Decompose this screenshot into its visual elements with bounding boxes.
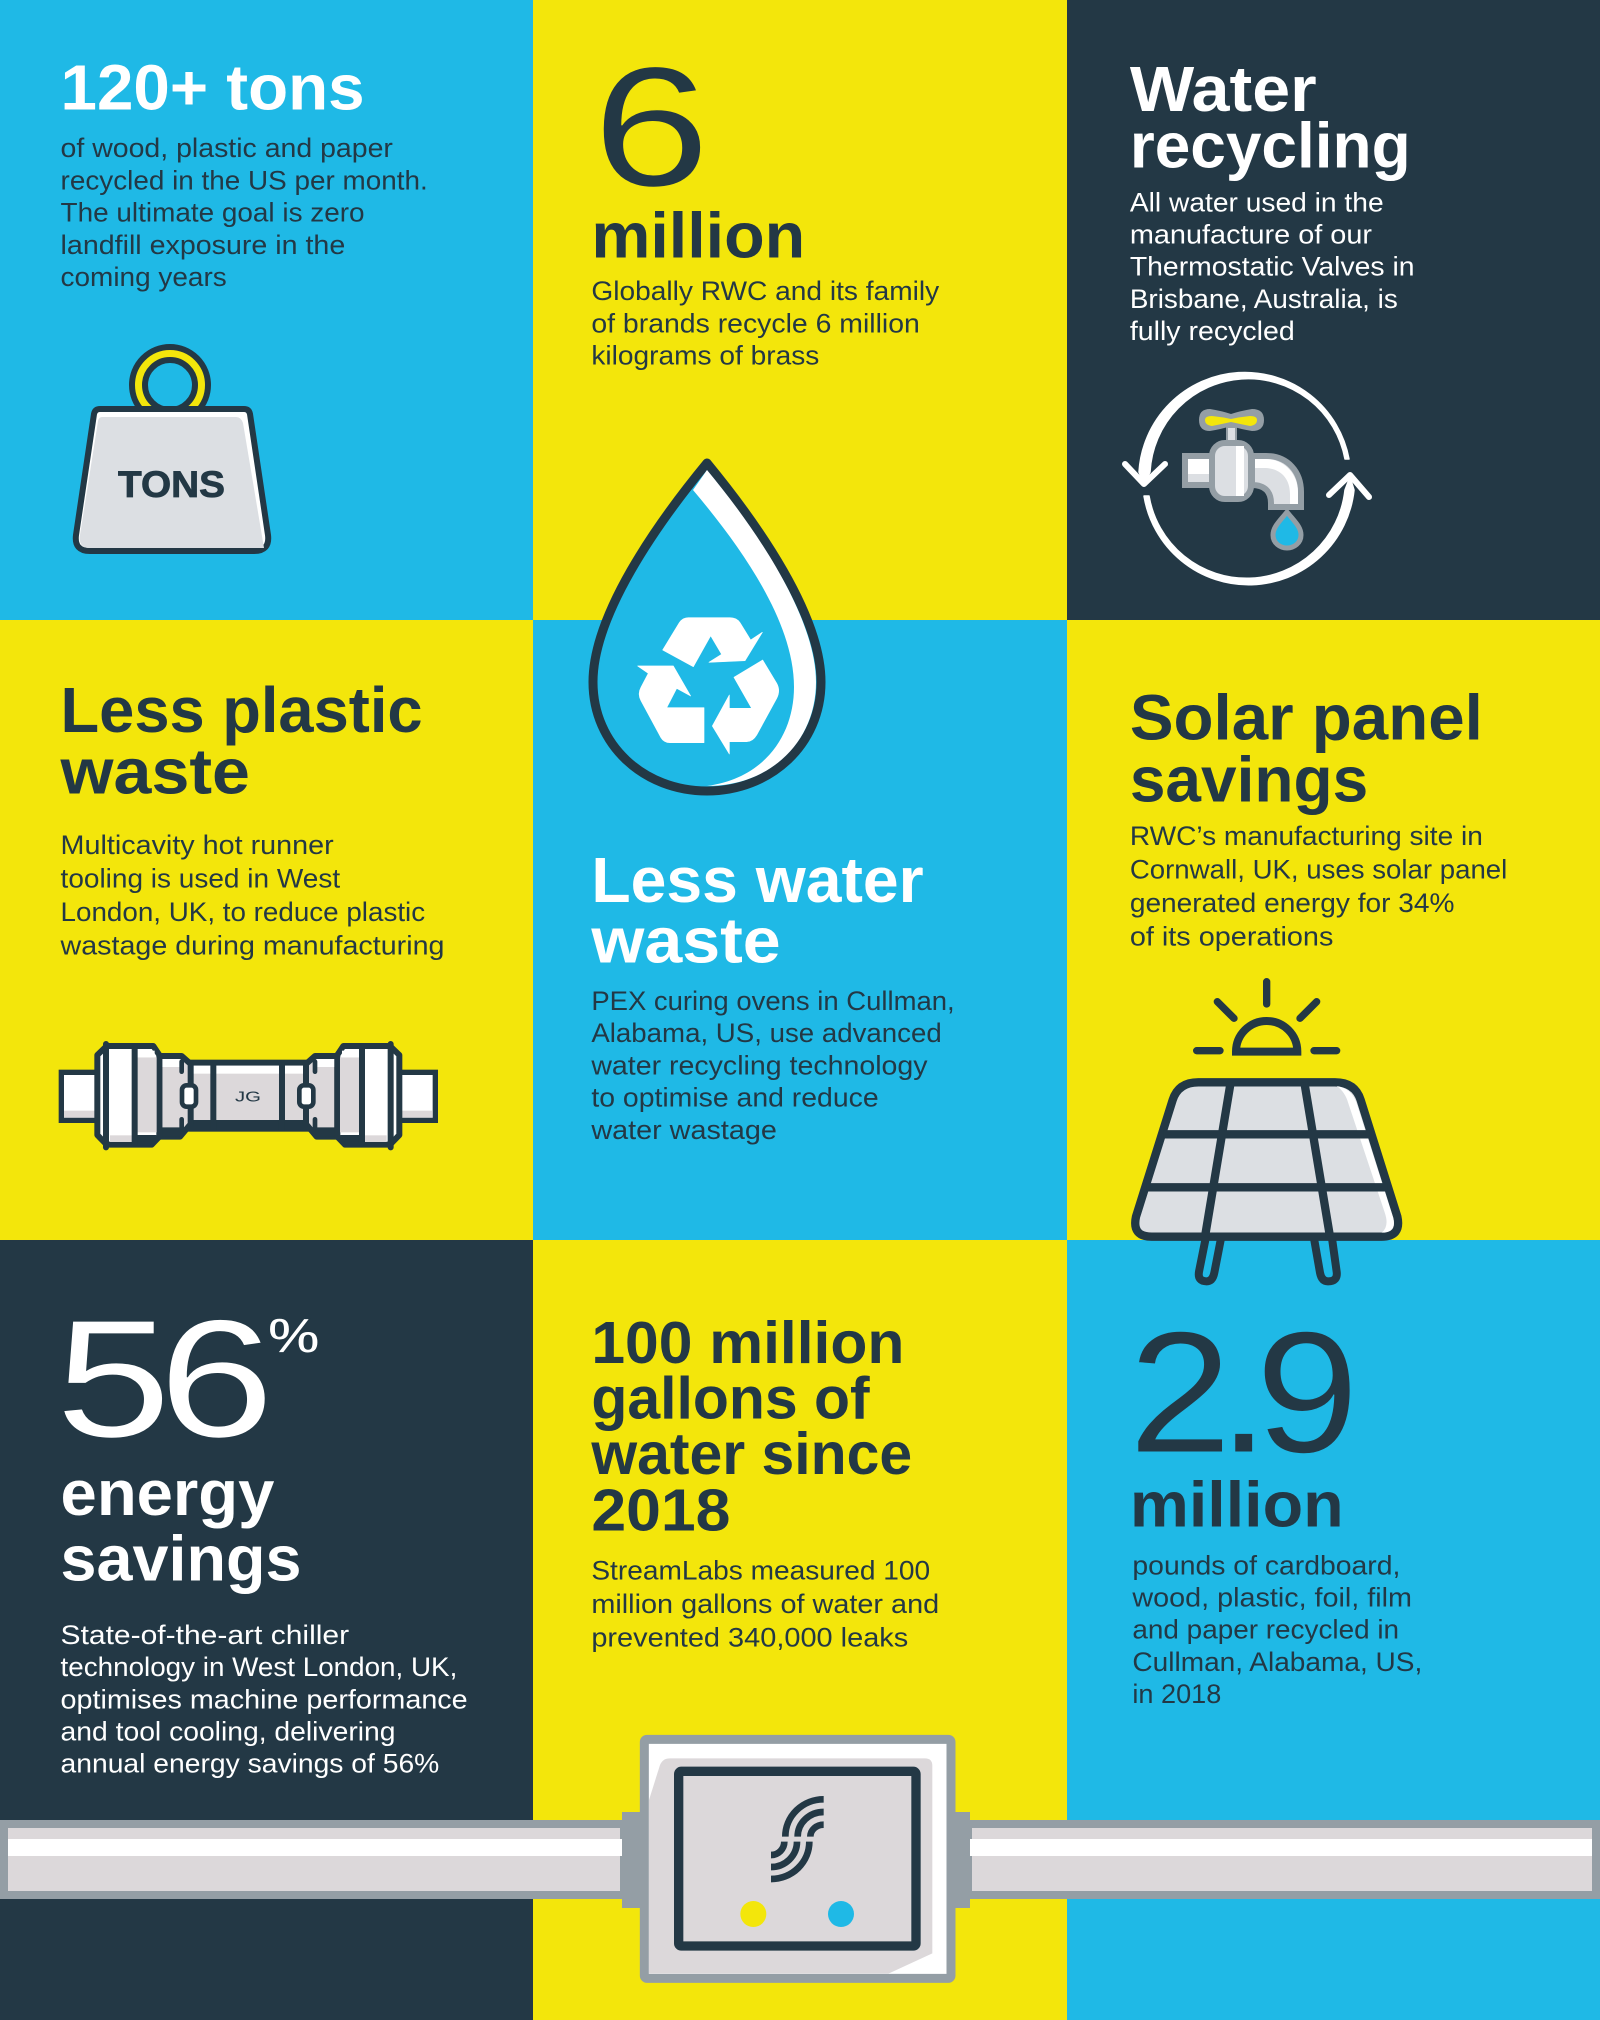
heading: Water recycling: recycling — [1130, 109, 1411, 181]
panel: 120+ tons recycled — [0, 0, 534, 620]
text: brass description: Globally RWC and its family — [591, 276, 940, 306]
big number: 2.9: 2.9 — [1129, 1296, 1350, 1489]
text: water recycling description: Thermostatic Valves in — [1130, 252, 1415, 282]
text: water recycling description — [1130, 187, 1415, 346]
big number: 56% — [55, 1285, 319, 1472]
text: solar description — [1130, 821, 1507, 952]
text: tons description: coming years — [61, 262, 227, 292]
heading: Less water waste: Less water — [591, 844, 924, 916]
pipe collars — [622, 1812, 970, 1908]
heading: energy savings — [61, 1457, 301, 1595]
text: brass description — [591, 276, 940, 371]
heading: 100 million gallons of water since 2018: water since — [590, 1420, 912, 1487]
text: water waste description: Alabama, US, use advanced — [591, 1018, 942, 1048]
heading: 100 million gallons of water since 2018: 100 million — [591, 1309, 904, 1376]
text: water waste description: to optimise and reduce — [591, 1083, 879, 1113]
heading: Less plastic waste: Less plastic — [61, 674, 423, 746]
panel: less water waste — [533, 620, 1067, 1240]
text: energy description: technology in West London, UK, — [61, 1652, 457, 1682]
icon: weight labelled TONS — [76, 347, 268, 551]
text: tons description — [61, 133, 428, 292]
text: energy description — [61, 1620, 468, 1779]
panel: water recycling — [1067, 0, 1600, 620]
heading: Less plastic waste — [59, 674, 423, 808]
text: water waste description: water wastage — [590, 1115, 777, 1145]
text: tons description: landfill exposure in the — [61, 230, 345, 260]
text: StreamLabs description: prevented 340,000 leaks — [591, 1622, 908, 1652]
text: water waste description: PEX curing ovens in Cullman, — [591, 986, 955, 1016]
text: plastic description: tooling is used in West — [61, 864, 341, 894]
panel: 56% energy savings — [0, 1240, 534, 2020]
text: energy description: State-of-the-art chiller — [61, 1620, 349, 1650]
text: solar description: RWC’s manufacturing site in — [1130, 821, 1483, 851]
text: tons description: The ultimate goal is zero — [61, 198, 365, 228]
text: solar description: Cornwall, UK, uses solar panel — [1130, 855, 1507, 885]
big number: 56%: % — [268, 1310, 319, 1364]
text: solar description: generated energy for 34% — [1130, 888, 1454, 918]
heading: Solar panel savings — [1130, 681, 1483, 815]
text: water recycling description: manufacture of our — [1130, 219, 1372, 249]
heading: million: million — [591, 200, 805, 272]
panel: 6 million kilograms of brass — [533, 0, 1067, 620]
heading: 100 million gallons of water since 2018: gallons of — [591, 1364, 870, 1431]
heading: Water recycling — [1130, 53, 1411, 181]
text: pounds description: wood, plastic, foil, film — [1131, 1583, 1412, 1613]
text: water recycling description: All water used in the — [1130, 187, 1384, 217]
text: StreamLabs description — [591, 1555, 939, 1652]
heading: Less water waste: waste — [590, 904, 781, 976]
heading: 120+ tons: 120+ tons — [61, 52, 365, 124]
icon: solar panel and sun — [1135, 982, 1398, 1281]
heading: energy savings: savings — [61, 1523, 301, 1595]
text: plastic description: London, UK, to reduce plastic — [61, 897, 425, 927]
text: water recycling description: fully recycled — [1130, 316, 1295, 346]
meter on water pipe — [4, 1739, 1596, 1978]
heading: Less plastic waste: waste — [59, 736, 250, 808]
panel: solar panel savings — [1067, 620, 1600, 1281]
text: solar description: of its operations — [1130, 922, 1333, 952]
device: water meter — [644, 1739, 951, 1978]
heading: Water recycling: Water — [1130, 53, 1317, 125]
text: energy description: optimises machine performance — [61, 1684, 468, 1714]
text: water waste description: water recycling technology — [590, 1050, 928, 1080]
heading: Solar panel savings: savings — [1130, 743, 1368, 815]
text: brass description: kilograms of brass — [591, 341, 819, 371]
text: energy description: annual energy savings of 56% — [61, 1749, 439, 1779]
text: StreamLabs description: million gallons of water and — [591, 1589, 939, 1619]
heading: energy savings: energy — [61, 1457, 275, 1529]
heading: Solar panel savings: Solar panel — [1130, 681, 1483, 753]
icon: tap within circular arrows — [1125, 372, 1369, 585]
heading: 100 million gallons of water since 2018: 2018 — [591, 1477, 730, 1544]
text: water recycling description: Brisbane, Australia, is — [1130, 284, 1398, 314]
text: brass description: of brands recycle 6 million — [591, 308, 920, 338]
text: energy description: and tool cooling, delivering — [61, 1716, 396, 1746]
text: plastic description — [59, 830, 444, 961]
icon: weight labelled TONS: TONS — [118, 464, 225, 505]
text: tons description: recycled in the US per month. — [61, 165, 428, 195]
text: pounds description: Cullman, Alabama, US, — [1132, 1647, 1422, 1677]
icon: pipe fitting: JG — [235, 1089, 261, 1105]
pipe: right section — [968, 1824, 1596, 1895]
big number: 6: 6 — [593, 33, 710, 223]
panel: 2.9 million pounds recycled — [1067, 1240, 1600, 2020]
icon: pipe fitting — [61, 1044, 435, 1147]
pipe: left section — [4, 1824, 624, 1895]
panel: 100 million gallons — [533, 1240, 1067, 2020]
text: tons description: of wood, plastic and paper — [61, 133, 393, 163]
heading: 100 million gallons of water since 2018 — [590, 1309, 912, 1544]
text: pounds description: pounds of cardboard, — [1132, 1550, 1400, 1580]
big number: 56%: 56 — [55, 1285, 265, 1472]
panel: less plastic waste — [0, 620, 534, 1240]
text: pounds description — [1131, 1550, 1422, 1709]
text: pounds description: in 2018 — [1132, 1679, 1221, 1709]
text: StreamLabs description: StreamLabs measured 100 — [591, 1555, 930, 1585]
text: pounds description: and paper recycled in — [1132, 1615, 1399, 1645]
heading: Less water waste — [590, 844, 924, 976]
heading: million: million — [1130, 1469, 1344, 1541]
text: plastic description: wastage during manufacturing — [59, 931, 444, 961]
icon: water drop with recycle symbol — [593, 463, 821, 791]
text: water waste description — [590, 986, 955, 1145]
text: plastic description: Multicavity hot runner — [61, 830, 334, 860]
